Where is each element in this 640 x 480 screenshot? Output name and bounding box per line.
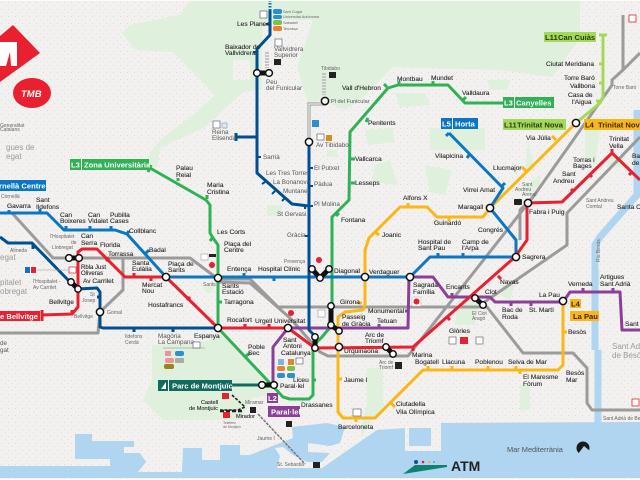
station labels: north west: Superior xyxy=(274,52,298,59)
district names: de xyxy=(0,340,8,347)
icon: Fabra i Puig bus xyxy=(514,199,522,205)
station labels: centre: Jaume I xyxy=(257,436,275,442)
station labels: north west: Muntaner xyxy=(283,188,310,195)
station labels: east: Urquinaona xyxy=(344,348,378,355)
station labels: north east: Vella xyxy=(609,143,624,150)
interchange stations xyxy=(66,70,580,388)
icon: Magoria lines legend xyxy=(163,342,205,369)
terminus box: L3 Zona Universitaria: L3 xyxy=(71,160,80,170)
station labels: east: Marina xyxy=(412,352,432,359)
station labels: centre: Antoni xyxy=(283,343,302,350)
logo: black circular symbol xyxy=(576,442,590,456)
inner dock xyxy=(409,428,431,446)
station labels: centre: Rocafort xyxy=(227,317,252,324)
caption under logo: Catalans xyxy=(0,127,20,133)
station labels: north east: Ciutat Meridiana xyxy=(546,61,594,68)
station labels: west: Cornellà xyxy=(1,194,20,200)
terminus box: L4 La Pau xyxy=(570,299,599,321)
park: Collserola xyxy=(122,1,580,167)
station labels: east: Fòrum xyxy=(523,381,543,388)
station labels: L3 north and L5 Horta xyxy=(341,75,504,239)
station labels: north east: Casa de xyxy=(568,92,593,99)
icon: Glories parking and mall xyxy=(449,337,483,344)
station labels: centre: Sants xyxy=(222,283,240,290)
open sea xyxy=(322,422,640,478)
station labels: centre: Teleferic xyxy=(223,421,236,425)
station labels: north east: Sant Andreu xyxy=(586,198,614,204)
station labels: L3 north and L5 Horta: Fontana xyxy=(341,217,366,224)
icon: St Sebastia black xyxy=(313,462,320,468)
station labels: east: Sant Adrià xyxy=(600,281,631,288)
station circles xyxy=(66,70,580,388)
station labels: west: Josep xyxy=(82,298,96,304)
station labels: centre: Centre xyxy=(224,247,244,254)
station labels: north east: Andreu xyxy=(515,187,531,193)
station labels: east: Aragó xyxy=(472,316,486,322)
river xyxy=(595,110,637,350)
station labels: west: Can xyxy=(81,233,93,240)
station labels: east: St. Martí xyxy=(529,307,554,314)
line L6 L7 dark blue xyxy=(236,10,315,336)
station labels: east: Sant Pau xyxy=(418,245,445,252)
station labels: west: Almeda xyxy=(10,248,27,254)
pier St Sebastia xyxy=(275,447,322,468)
station labels: east: Arc de xyxy=(365,332,384,339)
station labels: centre: Sant xyxy=(283,337,297,344)
station labels: east: Glòries xyxy=(449,328,471,335)
station labels: east: El Maresme xyxy=(523,374,559,381)
station labels: east: Passeig xyxy=(342,314,366,321)
station labels: west: Bellvitge xyxy=(74,314,93,320)
station labels: east: de Gràcia xyxy=(342,321,371,328)
station labels: north west: Tibidabo xyxy=(321,66,340,72)
station labels: north west: Vallvidrera xyxy=(274,46,304,53)
station labels: east: Poblenou xyxy=(475,359,503,366)
logo: ATM: ATM xyxy=(451,458,480,474)
district names: egat xyxy=(0,253,16,262)
terminus box: L3 Zona Universitaria: Zona Universitària xyxy=(84,160,151,170)
line L3 xyxy=(148,81,503,399)
station labels: east: Barceloneta xyxy=(338,424,374,431)
terminus box: Parc de Montjuic: Parc de Montjuïc xyxy=(172,382,233,390)
line L8 Llobregat dark blue xyxy=(0,237,218,332)
station labels: north west: Reial xyxy=(176,172,192,179)
station labels: east: Bac de xyxy=(502,307,523,314)
terminus box: L4 La Pau: La Pau xyxy=(573,312,598,321)
station labels: west: Florida xyxy=(100,242,120,249)
icon: top right hospital xyxy=(629,15,636,22)
station labels: west: Cases xyxy=(110,218,129,225)
station labels: east: Sagrada xyxy=(413,282,438,289)
line L2 xyxy=(273,277,640,385)
station labels: north west: Av Tibidabo xyxy=(316,142,349,149)
line L1 xyxy=(42,149,640,351)
logo: TMB xyxy=(13,78,51,108)
station labels: east: Arc de xyxy=(379,360,394,366)
district names xyxy=(0,143,640,360)
icon: Miramar black xyxy=(250,407,256,413)
terminus box: L11 Trinitat Nova: L11 xyxy=(504,120,517,130)
terminus box: L11 Trinitat Nova: Trinitat Nova xyxy=(517,120,564,130)
station labels: L3 north and L5 Horta: Mundet xyxy=(431,75,453,82)
terminus box: L3 Zona Universitaria xyxy=(70,159,151,170)
station labels: west: Can xyxy=(88,212,100,219)
station labels: north west: Baixador de xyxy=(225,44,261,51)
terminus box: L5 Horta: L5 xyxy=(442,120,452,128)
station labels: north east: Fabra i Puig xyxy=(529,209,565,216)
station labels: centre: Sec xyxy=(248,350,260,357)
terminus box: L3 Canyelles xyxy=(503,97,554,108)
station labels: west: Gavarra xyxy=(7,203,31,210)
station labels: east: Diagonal xyxy=(334,268,361,275)
station labels: L3 north and L5 Horta: Alfons X xyxy=(403,195,428,202)
west sea and port xyxy=(0,423,345,478)
station labels: L3 north and L5 Horta: Montbau xyxy=(397,76,423,83)
station labels: west: Oliveras xyxy=(81,271,103,277)
station labels: west: Eulàlia xyxy=(132,266,152,273)
station labels: centre: Plaça del xyxy=(224,241,252,248)
station labels: north east: Llucmajor xyxy=(493,165,522,172)
station labels: east: Encants xyxy=(446,284,471,291)
station labels: east: Ciutadella xyxy=(396,401,426,408)
station labels: centre: de Montjuïc xyxy=(189,406,218,412)
station labels: centre: Estació xyxy=(222,289,244,296)
station labels: east: Clot xyxy=(485,289,497,296)
caption under logo xyxy=(0,123,25,133)
terminus box: L4 Trinitat Nova xyxy=(584,119,640,130)
station labels: north east: Sant xyxy=(522,182,533,188)
cable line to St Sebastia xyxy=(258,414,305,464)
station labels: east: Monumental xyxy=(368,308,405,315)
station labels: L3 north and L5 Horta: Vilapicina xyxy=(435,153,463,160)
terminus box: Cornella Centre: rnellà Centre xyxy=(0,182,45,190)
station labels: north west: St Gervasi xyxy=(277,211,306,218)
station labels: east: Navas xyxy=(500,279,519,286)
icon: funicular black xyxy=(274,59,281,65)
icon: Sants station hospital and bus xyxy=(201,254,216,268)
terminus box: L4 La Pau: L4 xyxy=(571,300,581,308)
station labels: west: Badal xyxy=(149,247,166,254)
icon: Provenca hospital xyxy=(316,257,322,263)
station labels: centre: Espanya xyxy=(194,333,220,340)
station labels: centre: de Montjuïc xyxy=(223,425,241,429)
terminus box: L11 Can Cuias: L11 xyxy=(545,33,558,42)
station labels: west: St xyxy=(90,292,95,298)
station labels: east: Verneda xyxy=(568,281,593,288)
station labels: west: Torrassa xyxy=(108,251,134,258)
station labels: east: Tetuan xyxy=(377,318,397,325)
station labels: west: Gornal xyxy=(107,310,122,316)
station labels: east: Besòs xyxy=(566,370,585,377)
logo: ATM xyxy=(403,458,480,474)
icon: Passeig de Gracia train xyxy=(318,310,325,317)
station labels: centre: Urgell xyxy=(255,318,273,325)
station labels: L3 north and L5 Horta: Lesseps xyxy=(355,180,380,187)
station labels: west: Plaça de xyxy=(168,261,194,268)
terminus box: L5 Horta: Horta xyxy=(455,120,476,128)
icon: Les Planes rail lines legend: Terrassa xyxy=(283,27,298,31)
station labels: east: l'Arpa xyxy=(462,245,479,252)
park: Montjuic xyxy=(143,335,275,420)
station labels: north east: Via Júlia xyxy=(526,135,551,142)
station labels: west: Sants xyxy=(168,267,186,274)
funicular Vallvidrera and Tibidabo xyxy=(267,52,324,95)
icon: Sagrada Familia hospital xyxy=(412,297,421,306)
station labels: north east: Bages xyxy=(573,163,592,170)
icon: Universitat hospital xyxy=(288,310,294,316)
station labels: north east: Torre Baró xyxy=(564,75,595,82)
station labels: north west: Cristina xyxy=(207,189,230,196)
terminus box: L11 Trinitat Nova xyxy=(503,119,566,130)
line striped start xyxy=(268,0,272,11)
station labels: L3 north and L5 Horta: Guinardó xyxy=(434,220,461,227)
station labels: north west: Pl Molina xyxy=(314,201,340,208)
station labels: centre: Provença xyxy=(284,259,305,265)
station labels: north west: La Bonanova xyxy=(273,179,311,186)
station labels: east: Triomf xyxy=(365,338,384,345)
district names: egat xyxy=(6,152,22,161)
station labels: north west: Gràcia xyxy=(287,232,306,239)
terminus box: L2 Paral-lel: L2 xyxy=(268,394,277,403)
station labels: north east: Trinitat xyxy=(609,136,629,143)
terminus box: L3 Canyelles: Canyelles xyxy=(516,98,551,108)
icon: Tibidabo funicular black xyxy=(329,72,336,78)
terminus box: L11 Can Cuias: Can Cuiàs xyxy=(558,33,595,42)
icon: Reina Elisenda xyxy=(213,121,227,128)
station labels: east: Verdaguer xyxy=(369,269,400,276)
icon: Sant Adria hospital xyxy=(632,399,639,406)
water: sea and river xyxy=(0,110,640,478)
station labels: west: de xyxy=(71,240,77,246)
station labels: centre: Paral·lel xyxy=(280,383,305,390)
station labels: centre: St. Sebastià xyxy=(277,462,304,468)
station labels: north east: Torras i xyxy=(573,157,595,164)
terminus box: L2 Paral-lel xyxy=(267,393,301,417)
station labels: west: Mercat xyxy=(142,282,162,289)
station labels: north east: Comtal xyxy=(586,204,602,210)
station labels: centre: Drassanes xyxy=(301,402,333,409)
station labels: west: Can xyxy=(60,212,72,219)
station labels: east: Bogatell xyxy=(415,359,439,366)
station labels: west: Hostafrancs xyxy=(148,302,184,309)
icon: Arc de Triomf train xyxy=(395,362,402,369)
station labels: east: Jaume I xyxy=(344,377,368,384)
station labels: north east: Torre Baró xyxy=(613,85,637,91)
station labels: centre: Tarragona xyxy=(224,299,254,306)
station labels: north west: Peu xyxy=(266,79,278,86)
station labels: L3 north and L5 Horta: Vall d'Hebron xyxy=(342,85,381,92)
icon: Catalunya lines legend xyxy=(277,358,303,378)
terminus box: L4 Trinitat Nova: L4 xyxy=(585,120,595,130)
station labels: east xyxy=(334,239,640,431)
station labels: west: Pubilla xyxy=(110,212,130,219)
station labels: north west: Les Planes xyxy=(237,21,270,28)
district names: obregat xyxy=(0,287,28,296)
station labels: west: Serra xyxy=(81,240,97,247)
station labels: north west: Sarrià xyxy=(263,154,280,161)
icon: Av Tibidabo info xyxy=(312,120,332,141)
station labels: north west: Pl del Funicular xyxy=(331,99,370,105)
terminus box: L2 Paral-lel: Paral·lel xyxy=(271,408,301,416)
station labels: north west: Elisenda xyxy=(212,135,237,142)
terminus box: Parc de Montjuic xyxy=(158,380,233,391)
line L5 xyxy=(0,133,516,281)
district names: gues de xyxy=(6,143,35,152)
station labels: centre: Ildefons xyxy=(125,334,143,340)
station labels: north west: Les Tres Torres xyxy=(266,170,309,177)
station labels: north east: Arenal xyxy=(522,192,536,198)
park: Ciutadella xyxy=(361,368,383,437)
station labels: west: Sant xyxy=(36,197,50,204)
station labels: west: l'Hospitalet xyxy=(50,234,75,240)
station labels: north east: Vallbona xyxy=(570,83,596,90)
station labels: north west xyxy=(176,21,370,239)
station labels: east: Roda xyxy=(502,314,518,321)
icon: Ciutadella zoo xyxy=(353,409,361,416)
station labels: north west: del Funicular xyxy=(266,85,302,92)
rail connector Tibidabo xyxy=(309,104,326,139)
station labels: centre: Mirador xyxy=(236,414,255,420)
icon: Les Planes rail lines legend: Sant Cugat xyxy=(283,10,303,14)
station labels: west: Vidalet xyxy=(88,218,108,225)
line L4 xyxy=(338,123,576,422)
district names: gat xyxy=(0,347,9,354)
label: Riu Besos: Riu Besòs xyxy=(596,239,602,262)
station labels: centre: Hospital Clínic xyxy=(258,266,301,273)
station labels: north west: Maria xyxy=(207,182,224,189)
logo: TMB: TMB xyxy=(21,89,42,100)
station labels: east: Besòs xyxy=(568,329,587,336)
station labels: east: Mar xyxy=(566,377,578,384)
station labels: north west: Les Corts xyxy=(217,229,246,236)
icon: Montjuic cable car red xyxy=(222,393,230,418)
station labels: centre: Poble xyxy=(248,344,265,351)
station labels: L3 north and L5 Horta: Virrei Amat xyxy=(463,187,495,194)
station labels: east: Hospital de xyxy=(418,239,451,246)
station labels: east: Triomf xyxy=(379,365,394,371)
district names: pitalet xyxy=(0,278,22,287)
station labels: east: Llacuna xyxy=(442,359,465,366)
station labels: east: Selva de Mar xyxy=(508,359,548,366)
station labels: centre: Liceu xyxy=(293,377,309,384)
station labels: north east: l'Aigua xyxy=(572,99,592,106)
station labels: north east: Andreu xyxy=(553,178,575,185)
station labels: L3 north and L5 Horta: Congrés xyxy=(478,227,504,234)
links between paired stations xyxy=(69,73,483,385)
caption under logo: Generalitat xyxy=(0,123,25,129)
station labels: west: Collblanc xyxy=(129,228,157,235)
funicular Montjuic line xyxy=(232,384,262,386)
terminus box: Hospital de Bellvitge: e Bellvitge xyxy=(0,312,38,321)
terminus box: L11 Can Cuias xyxy=(544,32,596,42)
icon: Drassanes monument xyxy=(286,421,292,427)
station labels: north west: Reina xyxy=(212,129,229,136)
station labels: centre: Cerdà xyxy=(125,340,139,346)
station labels: L3 north and L5 Horta: Joanic xyxy=(382,232,402,239)
station labels: north east: Sant xyxy=(562,171,576,178)
icon: Vallvidrera station xyxy=(275,39,282,46)
station labels: west: l'Hospitalet - xyxy=(33,279,61,285)
parks and green areas xyxy=(122,1,625,437)
station labels: L3 north and L5 Horta: Valldaura xyxy=(462,90,490,97)
station labels: L3 north and L5 Horta: Maragall xyxy=(458,204,484,211)
station labels: north west: Palau xyxy=(176,165,193,172)
station labels: west: Av Carrilet xyxy=(83,278,114,285)
station labels: west: Boixeres xyxy=(60,218,86,225)
station labels: east: Sagrera xyxy=(522,254,546,261)
station labels: west: Bellvitge xyxy=(49,299,74,306)
station labels: west: Llobregat xyxy=(52,245,73,251)
terminus box: L5 Horta xyxy=(441,118,478,129)
station labels: east: Camp de xyxy=(462,239,489,246)
station labels: centre: Castell xyxy=(201,400,218,406)
station labels: centre: Miramar xyxy=(245,400,264,406)
station labels: east: Sant xyxy=(625,321,639,328)
station labels: east: La Pau xyxy=(539,292,560,299)
station labels: centre: Magòria xyxy=(158,333,181,340)
line L11 xyxy=(576,35,607,123)
station labels: east: Artigues xyxy=(600,274,625,281)
label: Mar Mediterrania: Mar Mediterrània xyxy=(507,445,564,454)
cable car dashed line xyxy=(220,395,245,411)
station labels: north west: Pàdua xyxy=(314,181,333,188)
station labels: west: Ildefons xyxy=(36,204,60,211)
station labels: L3 north and L5 Horta: Vallcarca xyxy=(355,156,382,163)
station labels: north west: Vallvidrera xyxy=(225,50,256,57)
station labels: east: El Clot xyxy=(472,311,487,317)
station labels: centre xyxy=(125,241,333,468)
icon: Les Planes rail lines legend xyxy=(260,9,320,31)
terminus box: L3 Canyelles: L3 xyxy=(504,98,513,108)
station labels: centre: Sants xyxy=(203,282,216,288)
station labels: west: Rbla Just xyxy=(81,265,106,271)
station labels: north east xyxy=(493,61,640,216)
icon: Les Planes rail lines legend: Sabadell xyxy=(283,21,298,25)
station labels: east: Girona xyxy=(340,299,360,306)
station labels: west: Av Carrilet xyxy=(33,285,57,291)
station labels: east: Família xyxy=(413,289,435,296)
small parks xyxy=(203,80,625,410)
station labels: east: Vila Olímpica xyxy=(396,409,435,416)
station labels: L3 north and L5 Horta: Penitents xyxy=(368,120,396,127)
logo: Metro diamond xyxy=(0,25,40,82)
station labels: centre: La Campana xyxy=(158,339,195,346)
station labels: west: Santa xyxy=(132,260,150,267)
icon: Hospital left xyxy=(25,267,76,273)
station labels: centre: Catalunya xyxy=(281,350,311,357)
station labels: centre: Entença xyxy=(227,266,252,273)
station labels: west: Nou xyxy=(142,288,154,295)
station labels: north west: El Putxet xyxy=(314,165,339,172)
icon: Les Planes rail lines legend: Universitat Autònoma xyxy=(283,15,320,19)
station labels: centre: Universitat xyxy=(274,318,305,325)
station labels: west xyxy=(1,194,194,320)
